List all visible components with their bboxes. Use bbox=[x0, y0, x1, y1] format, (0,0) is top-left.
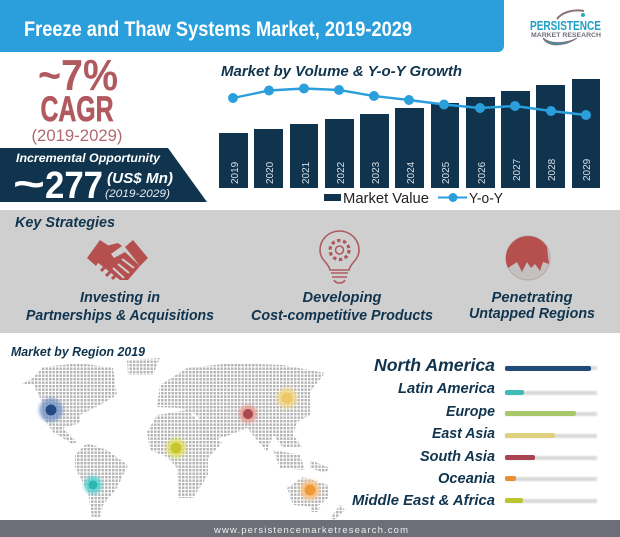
chart legend bbox=[324, 191, 503, 207]
East Asia row bbox=[432, 426, 597, 442]
footer bar bbox=[0, 520, 620, 537]
Middle East & Africa row: Middle East & Africa bbox=[352, 493, 495, 509]
incremental opportunity panel bbox=[0, 148, 207, 207]
North America row bbox=[374, 355, 597, 375]
map markers bbox=[39, 388, 320, 500]
logo: Persistence Market Research: MARKET RESEARCH bbox=[531, 33, 601, 39]
dotted world map bbox=[20, 358, 345, 520]
header banner bbox=[0, 0, 504, 52]
chart legend: Market Value bbox=[343, 191, 429, 207]
region bars: labels and progress bbox=[352, 355, 597, 509]
incremental opportunity panel: ~ bbox=[13, 160, 45, 207]
bar year labels: 2029 bbox=[582, 158, 593, 181]
South Asia row: South Asia bbox=[420, 449, 495, 465]
strategy: partnerships: Partnerships & Acquisitions bbox=[26, 307, 214, 324]
bar year labels: 2019 bbox=[230, 161, 241, 184]
Europe row: Europe bbox=[446, 404, 495, 420]
strategy: untapped regions bbox=[469, 289, 595, 322]
Latin America row bbox=[398, 381, 597, 397]
logo: Persistence Market Research bbox=[530, 10, 601, 45]
North America row: North America bbox=[374, 355, 495, 375]
marker: Africa bbox=[166, 438, 186, 458]
strategy: cost-competitive products bbox=[251, 289, 433, 324]
incremental opportunity panel: (US$ Mn) bbox=[107, 170, 173, 187]
incremental opportunity panel: (2019-2029) bbox=[105, 188, 170, 200]
bar year labels: 2020 bbox=[265, 161, 276, 184]
marker: Oceania bbox=[300, 480, 320, 500]
Europe row bbox=[446, 404, 597, 420]
Oceania row bbox=[438, 471, 597, 487]
South Asia row bbox=[420, 449, 597, 465]
icon: globe bbox=[506, 236, 550, 280]
region heading: Market by Region 2019 bbox=[11, 344, 146, 359]
CAGR callout: (2019-2029) bbox=[32, 126, 122, 145]
bar year labels: 2023 bbox=[371, 161, 382, 184]
CAGR callout bbox=[32, 51, 122, 145]
bar year labels: 2022 bbox=[336, 161, 347, 184]
bar year labels: 2026 bbox=[477, 161, 488, 184]
chart legend: Y-o-Y bbox=[469, 191, 503, 207]
marker: South Asia bbox=[239, 405, 257, 423]
Oceania row: Oceania bbox=[438, 471, 495, 487]
bar year labels: 2025 bbox=[441, 161, 452, 184]
CAGR callout: ~7% bbox=[38, 51, 118, 100]
icon: handshake bbox=[87, 240, 148, 280]
line chart: Y-o-Y growth bbox=[228, 84, 591, 120]
title: Freeze and Thaw Systems Market, 2019-2029 bbox=[24, 18, 412, 41]
bar year labels: 2021 bbox=[301, 161, 312, 184]
strategy: untapped regions: Untapped Regions bbox=[469, 305, 595, 322]
footer bar: www.persistencemarketresearch.com bbox=[213, 525, 408, 536]
strategy: cost-competitive products: Cost-competitive Products bbox=[251, 307, 433, 324]
marker: East Asia bbox=[277, 388, 297, 408]
chart heading: Market by Volume & Y-o-Y Growth bbox=[221, 63, 462, 80]
marker: Latin America bbox=[84, 476, 102, 494]
incremental opportunity panel: 277 bbox=[45, 165, 103, 207]
marker: North America bbox=[39, 398, 63, 422]
panel: key strategies bbox=[0, 210, 620, 333]
CAGR callout: CAGR bbox=[40, 90, 114, 129]
incremental opportunity panel: Incremental Opportunity bbox=[16, 153, 161, 165]
bar year labels: 2027 bbox=[512, 158, 523, 181]
logo: Persistence Market Research: PERSISTENCE bbox=[530, 18, 601, 33]
East Asia row: East Asia bbox=[432, 426, 495, 442]
strategy: partnerships: Investing in bbox=[80, 289, 160, 306]
bar year labels: 2028 bbox=[547, 158, 558, 181]
key strategies heading: Key Strategies bbox=[15, 214, 115, 231]
Latin America row: Latin America bbox=[398, 381, 495, 397]
strategy: partnerships bbox=[26, 289, 214, 324]
strategy: cost-competitive products: Developing bbox=[302, 289, 382, 306]
icon: lightbulb with gear bbox=[320, 231, 359, 283]
bar year labels: 2024 bbox=[406, 161, 417, 184]
bar year labels bbox=[230, 158, 593, 184]
strategy: untapped regions: Penetrating bbox=[492, 289, 572, 306]
bar chart: market value bbox=[219, 79, 600, 188]
Middle East & Africa row bbox=[352, 493, 597, 509]
